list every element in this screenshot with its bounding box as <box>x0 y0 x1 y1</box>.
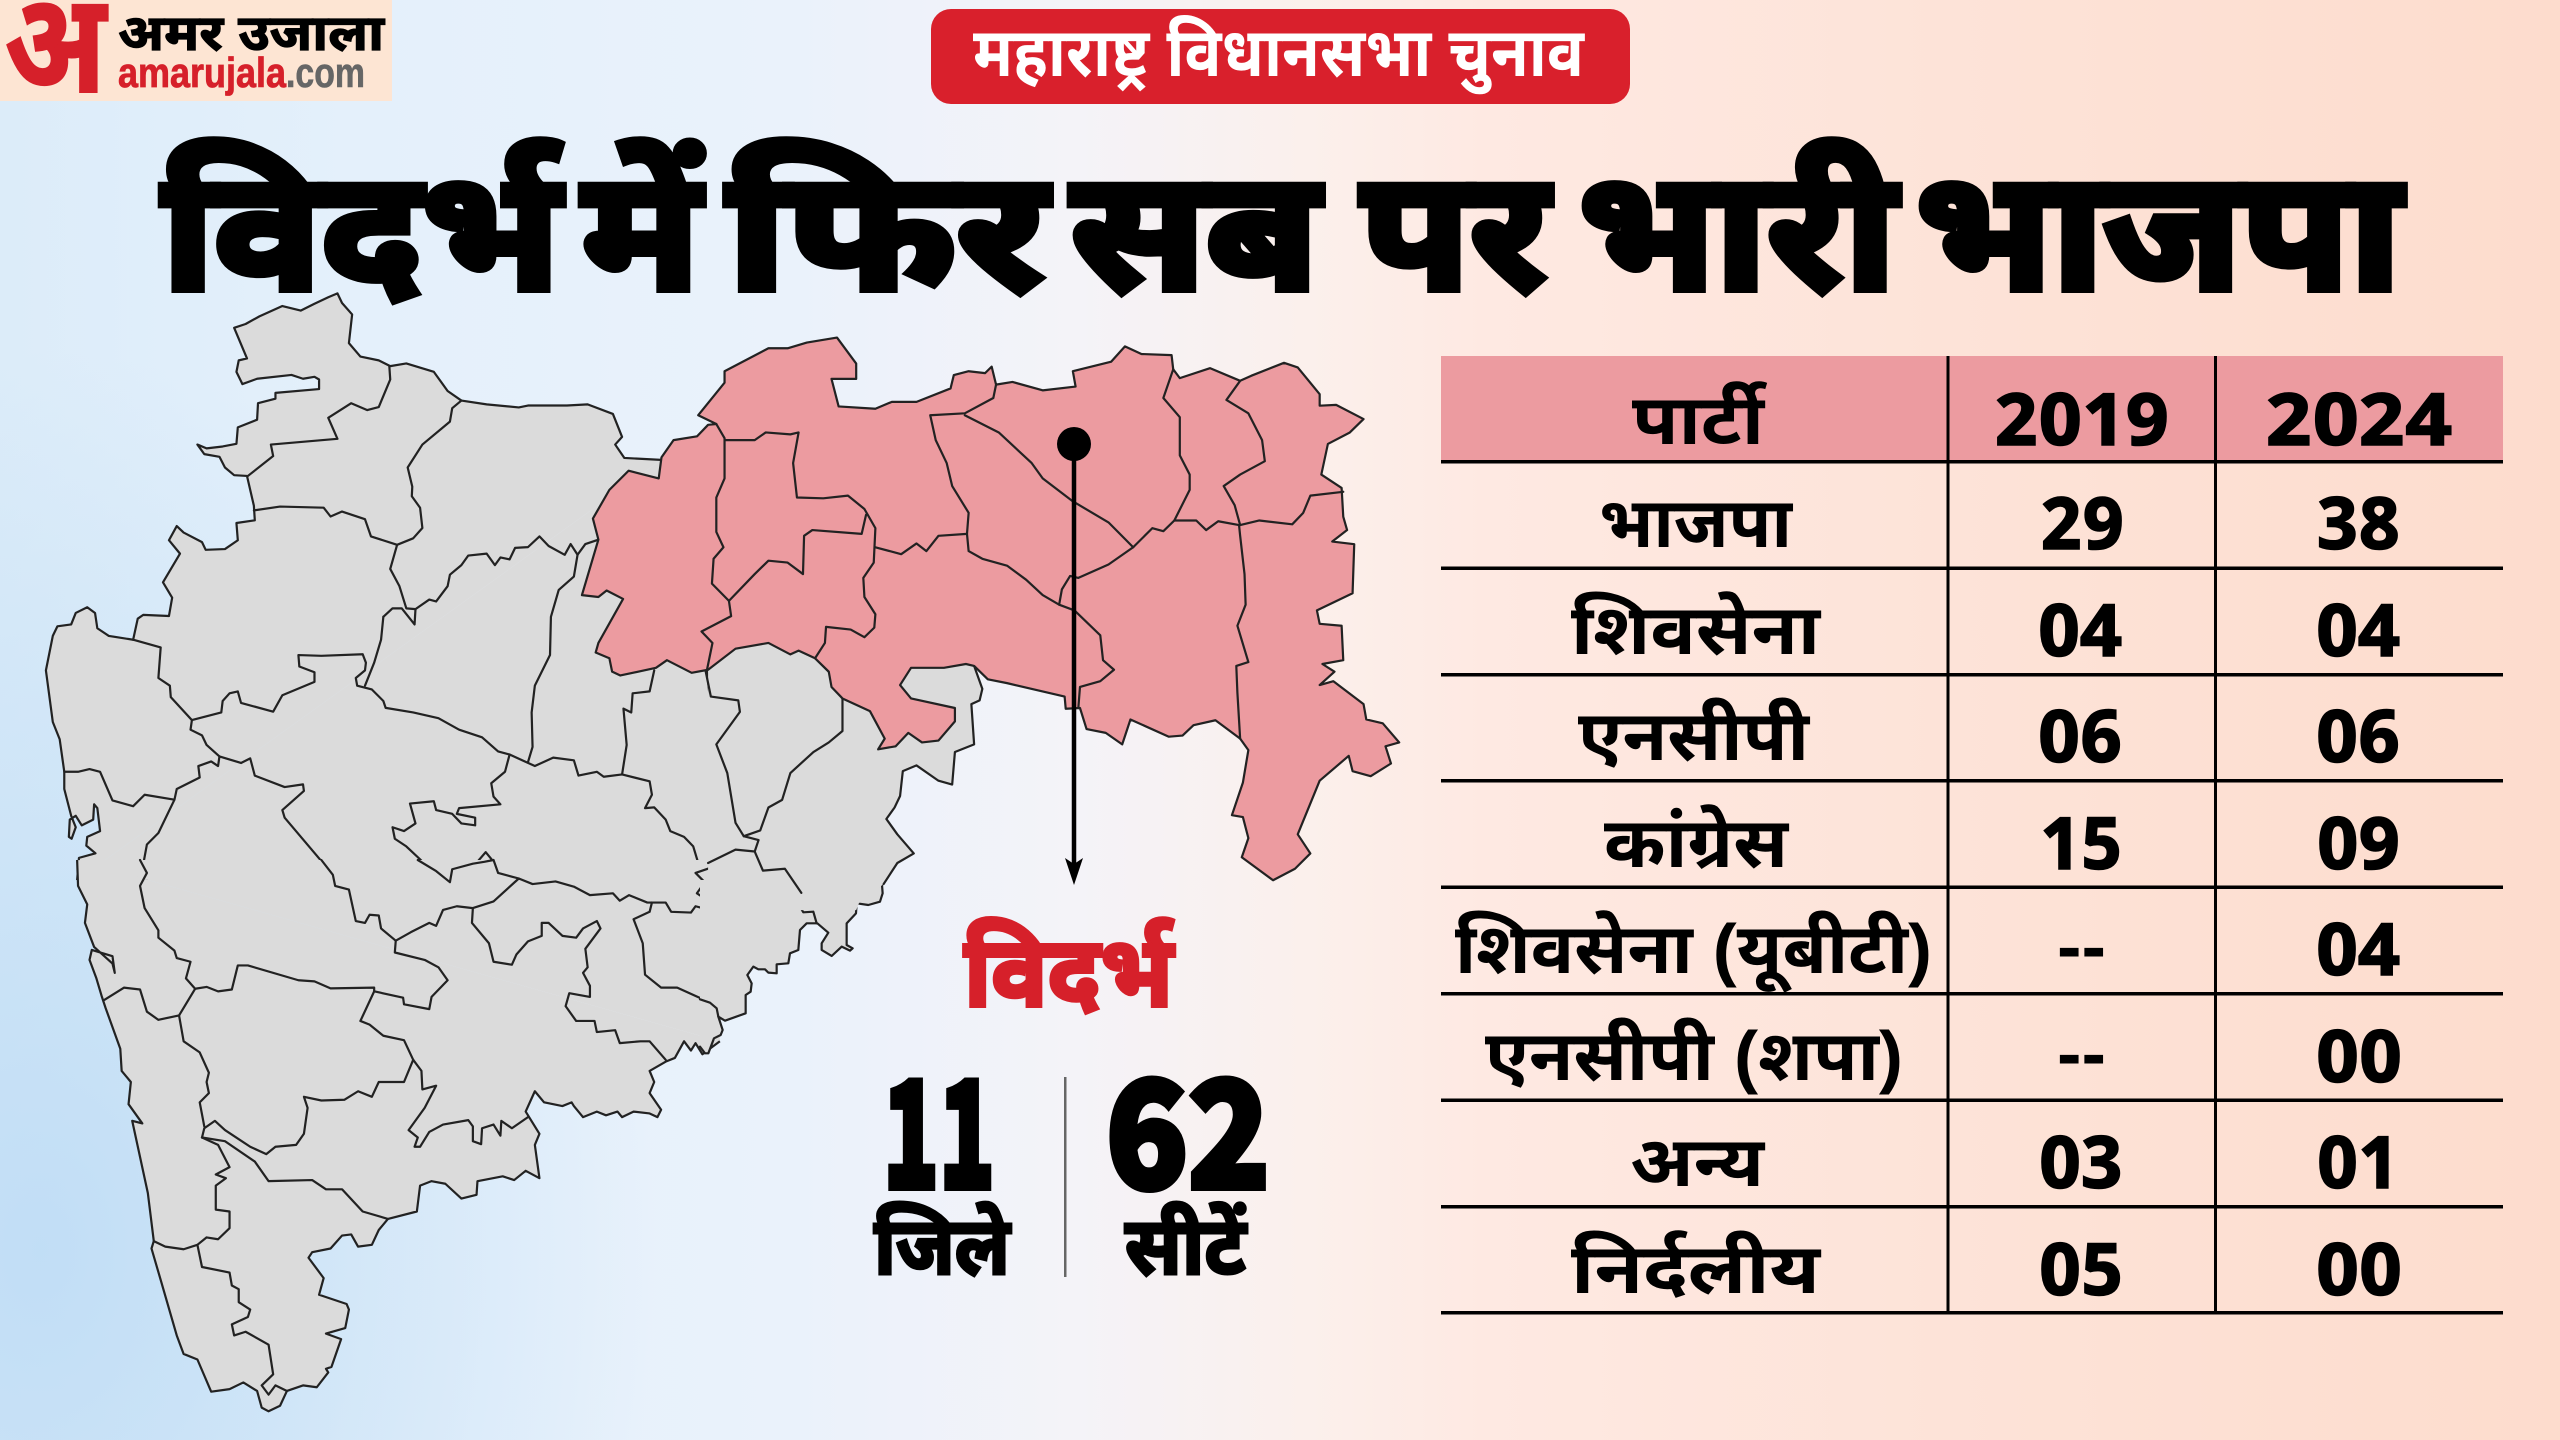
row: Shiv Sena UBT: शिवसेना (यूबीटी) <box>1455 909 1932 993</box>
table header labels: 2019 <box>1995 381 2169 475</box>
row: Others: अन्य <box>1630 1123 1766 1201</box>
row: NCP SP: -- <box>2057 1014 2106 1094</box>
map: south region <box>77 860 720 1411</box>
header pill: Maharashtra assembly election: महाराष्ट्र विधानसभा चुनाव <box>973 15 1586 94</box>
row: NCP SP <box>1485 1014 2402 1112</box>
stat: 11 districts: जिले <box>874 1201 1012 1291</box>
stat: 62 seats: सीटें <box>1125 1202 1248 1291</box>
row: BJP <box>1599 484 2400 579</box>
row: Congress: 15 <box>2040 805 2122 899</box>
row: Shiv Sena: शिवसेना <box>1571 590 1822 669</box>
label: Vidarbha: विदर्भ <box>964 917 1175 1027</box>
row: NCP: 06 <box>2316 698 2400 792</box>
title: विदर्भ <box>162 140 564 325</box>
row: Congress <box>1604 803 2400 899</box>
title: सब <box>1071 140 1323 325</box>
row: Independents: निर्दलीय <box>1571 1230 1822 1308</box>
logo: Amar Ujala <box>0 0 392 122</box>
row: Shiv Sena UBT <box>1455 907 2400 1005</box>
map: Vidarbha highlighted region <box>582 338 1399 880</box>
map: east coast detail <box>700 880 883 1053</box>
divider <box>1064 1077 1066 1277</box>
row: Others: 01 <box>2317 1124 2399 1218</box>
row: Others: 03 <box>2039 1124 2123 1218</box>
title: में <box>582 140 703 325</box>
table header labels: पार्टी <box>1632 381 1768 459</box>
row: Independents <box>1571 1230 2402 1325</box>
title: पर <box>1361 140 1551 325</box>
arrow: pointer from map to Vidarbha label <box>1057 427 1091 885</box>
map: central-east gray districts and Vidarbha pink region <box>582 338 1399 910</box>
title <box>162 140 2404 325</box>
row: NCP: 06 <box>2038 698 2122 792</box>
row: NCP SP: एनसीपी (शपा) <box>1485 1017 1903 1095</box>
row: NCP SP: 00 <box>2316 1018 2402 1112</box>
table header band <box>1441 356 2503 461</box>
row: NCP <box>1578 697 2400 792</box>
row: Independents: 00 <box>2316 1231 2402 1325</box>
row: BJP: 38 <box>2317 485 2400 579</box>
map: Maharashtra districts <box>46 293 1399 1411</box>
row: BJP: भाजपा <box>1599 484 1793 562</box>
row: Congress: कांग्रेस <box>1604 803 1789 882</box>
row: NCP: एनसीपी <box>1578 697 1810 775</box>
logo: Amar Ujala: अमर उजाला <box>118 5 385 61</box>
row: Shiv Sena <box>1571 590 2400 686</box>
row: Shiv Sena UBT: -- <box>2057 907 2106 987</box>
row: Shiv Sena: 04 <box>2316 592 2400 686</box>
stat: 11 districts: 11 <box>883 1016 995 1231</box>
title: भाजपा <box>1915 140 2404 325</box>
row: Others <box>1630 1123 2399 1218</box>
logo: Amar Ujala: amarujala <box>118 49 287 96</box>
map: north-west region <box>46 293 720 880</box>
row: Shiv Sena UBT: 04 <box>2316 911 2400 1005</box>
table rules <box>1441 356 2503 1314</box>
row: BJP: 29 <box>2041 485 2124 579</box>
table header labels: 2024 <box>2266 381 2452 475</box>
row: Independents: 05 <box>2039 1231 2123 1325</box>
title: भारी <box>1578 140 1899 325</box>
logo: Amar Ujala: .com <box>286 49 365 96</box>
title: फिर <box>727 140 1049 325</box>
stat: 62 seats: 62 <box>1106 1016 1270 1231</box>
table header labels <box>1632 381 2452 475</box>
row: Shiv Sena: 04 <box>2038 592 2122 686</box>
stat: 11 districts <box>874 1016 1012 1291</box>
table: party results 2019 vs 2024 <box>1441 356 2503 1325</box>
row: Congress: 09 <box>2317 805 2400 899</box>
map: Vidarbha district borders <box>702 369 1343 739</box>
